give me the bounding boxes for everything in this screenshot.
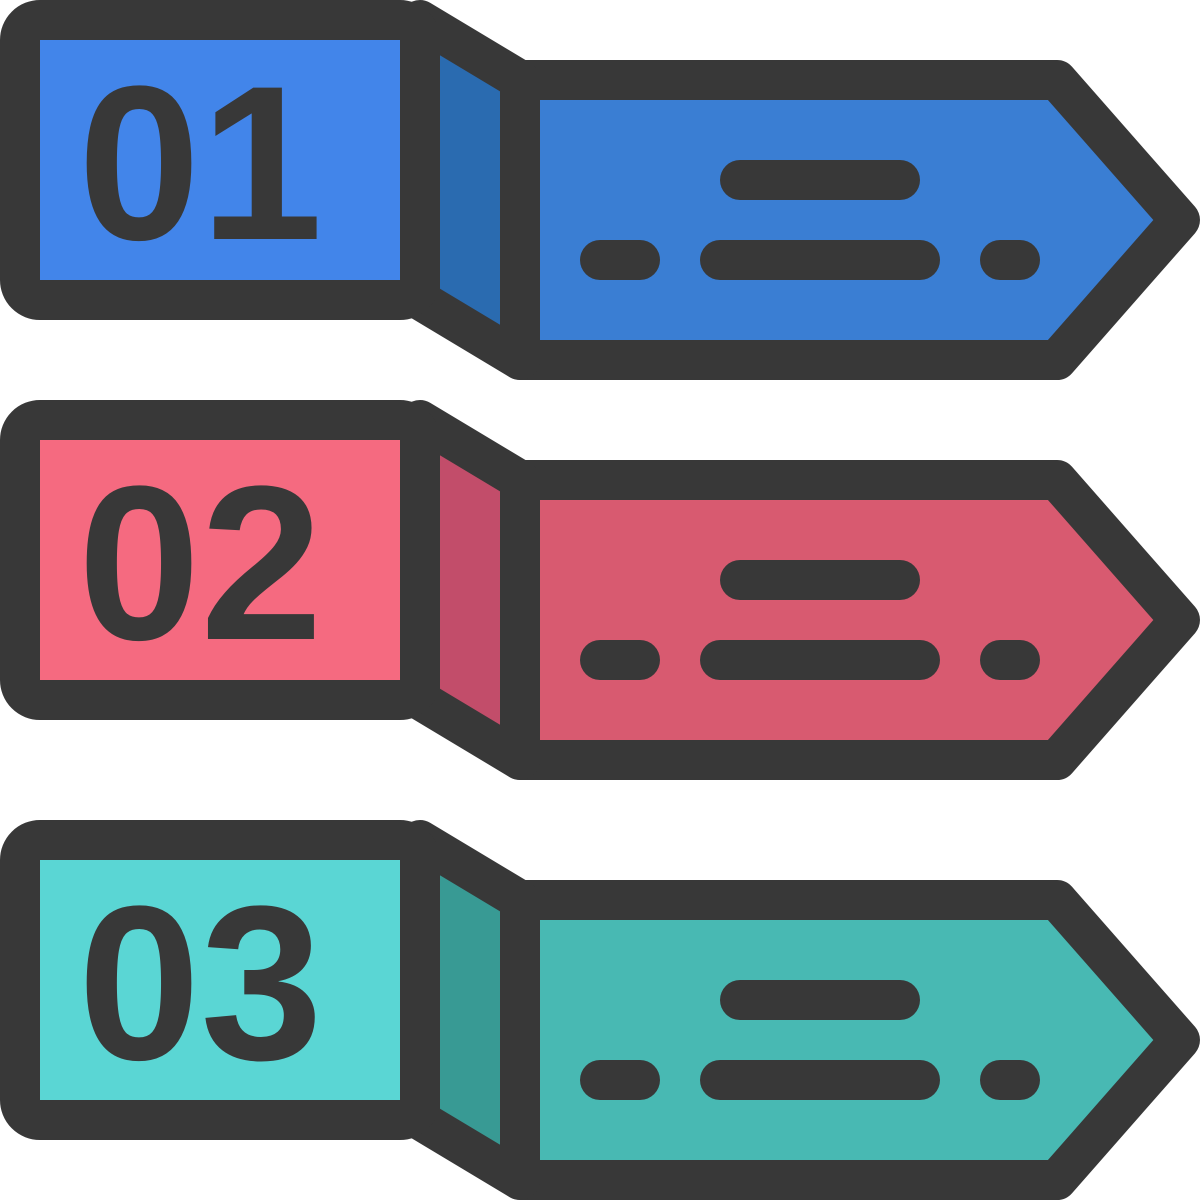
number 01: 01 [78, 40, 323, 286]
arrow panel 3 [520, 900, 1180, 1180]
number box 3 [20, 840, 420, 1120]
number 03: 03 [78, 860, 323, 1106]
row 3 [20, 840, 1180, 1180]
number 02: 02 [78, 440, 323, 686]
fold 1 [420, 20, 520, 360]
arrow panel 2 [520, 480, 1180, 760]
text lines 2 [600, 580, 1020, 660]
text lines 1 [600, 180, 1020, 260]
row 1 [20, 20, 1180, 360]
arrow panel 1 [520, 80, 1180, 360]
number box 2 [20, 420, 420, 700]
row 2 [20, 420, 1180, 760]
number box 1 [20, 20, 420, 300]
fold 2 [420, 420, 520, 760]
text lines 3 [600, 1000, 1020, 1080]
fold 3 [420, 840, 520, 1180]
